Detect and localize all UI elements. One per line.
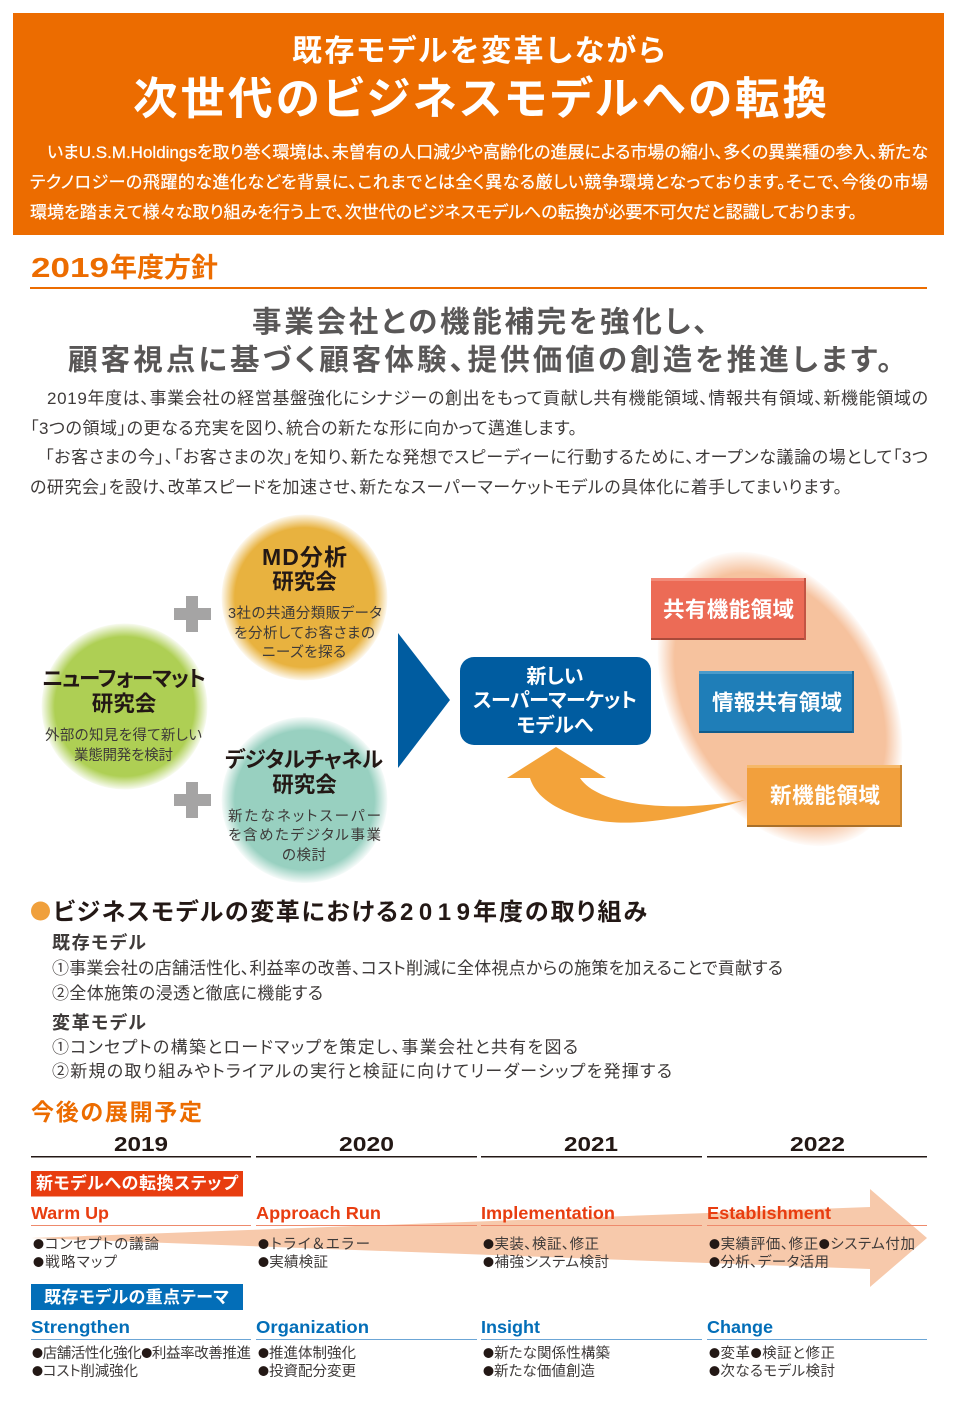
existing model theme names [31, 1317, 927, 1340]
circle: digital channel study group: を含めたデジタル事業 [228, 824, 381, 845]
year headers: 2019 [114, 1134, 168, 1156]
existing model theme names: Insight [481, 1317, 540, 1337]
heading: 2019 policy: 2019 [31, 252, 109, 283]
diagram: study groups and domains [42, 508, 953, 890]
policy body text: 「お客さまの今」、「お客さまの次」を知り、新たな発想でスピーディーに行動するために、オープンな議論の場として「3つ [45, 447, 928, 467]
circle: MD analysis study group: を分析してお客さまの [234, 622, 375, 643]
policy headline [68, 299, 892, 379]
new model step details: ●実績評価、修正●システム付加 [709, 1233, 915, 1254]
new model step names: Warm Up [31, 1203, 109, 1223]
circle: new format study group: ニューフォーマット [42, 662, 206, 693]
new model step details: ●戦略マップ [33, 1251, 118, 1272]
existing model theme details: ●投資配分変更 [258, 1360, 356, 1381]
arrow: blue chevron [398, 633, 450, 768]
existing model theme names: Organization [256, 1317, 369, 1337]
circle: new format study group: 外部の知見を得て新しい [45, 724, 202, 745]
panel: orange header banner [13, 13, 944, 235]
existing model theme details: ●コスト削減強化 [32, 1360, 138, 1381]
existing model text: 既存モデル [52, 929, 146, 955]
circle: digital channel study group [222, 717, 388, 883]
section heading: 2019 [400, 899, 470, 926]
reform model text: ①コンセプトの構築とロードマップを策定し、事業会社と共有を図る [52, 1033, 578, 1058]
circle: MD analysis study group: 3社の共通分類販データ [228, 604, 382, 622]
new model step names: Implementation [481, 1203, 615, 1223]
box: new supermarket model: スーパーマーケット [473, 684, 637, 713]
circle: MD analysis study group: MD分析 [262, 544, 347, 570]
existing model theme details: ●次なるモデル検討 [709, 1360, 835, 1381]
year headers: 2022 [790, 1134, 845, 1156]
arrow: large peach arrow [31, 1189, 927, 1287]
heading: 2019 policy [30, 246, 927, 289]
new model step names: Approach Run [256, 1203, 381, 1223]
reform model text: 変革モデル [52, 1009, 146, 1035]
policy body text: 「3つの領域」の更なる充実を図り、統合の新たな形に向かって邁進します。 [30, 419, 577, 438]
box: new supermarket model: 新しい [526, 660, 584, 689]
new model step details: ●コンセプトの議論 [33, 1233, 160, 1254]
circle: MD analysis study group: ニーズを探る [262, 641, 346, 662]
existing model theme details: ●店舗活性化強化●利益率改善推進 [32, 1342, 251, 1363]
box: shared function domain [651, 578, 806, 640]
new model step details: ●トライ＆エラー [258, 1233, 370, 1254]
banner title: 次世代のビジネスモデルへの転換 [133, 62, 827, 127]
existing model theme details: ●推進体制強化 [258, 1342, 356, 1363]
box: new supermarket model [460, 657, 651, 745]
circle: digital channel study group: デジタルチャネル [225, 743, 383, 774]
icon: orange bullet [31, 902, 50, 920]
policy headline: 事業会社との機能補完を強化し、 [252, 299, 708, 341]
existing model theme details: ●変革●検証と修正 [709, 1342, 835, 1363]
icon: plus lower [174, 782, 211, 818]
heading: future roadmap: 今後の展開予定 [31, 1093, 202, 1127]
year headers: 2020 [339, 1134, 394, 1156]
box: new function domain [747, 765, 902, 827]
year headers: 2021 [564, 1134, 618, 1156]
section heading: ビジネスモデルの変革における [53, 892, 398, 927]
new model step details [33, 1233, 915, 1272]
existing model text [52, 929, 783, 1004]
arrow: curved orange arrow [507, 747, 745, 823]
existing model theme names: Change [707, 1317, 773, 1337]
reform model text: ②新規の取り組みやトライアルの実行と検証に向けてリーダーシップを発揮する [52, 1057, 672, 1082]
heading: 2019 policy: 年度方針 [110, 246, 218, 285]
box: information sharing domain: 情報共有領域 [712, 686, 842, 717]
box: information sharing domain [699, 671, 854, 733]
section heading [53, 892, 647, 927]
label: existing model themes: 既存モデルの重点テーマ [44, 1283, 229, 1308]
circle: MD analysis study group: 研究会 [272, 565, 337, 596]
box: new function domain: 新機能領域 [770, 779, 880, 810]
circle: digital channel study group: の検討 [282, 844, 326, 865]
timeline roadmap [31, 1134, 927, 1381]
new model step details: ●実績検証 [258, 1251, 328, 1272]
circle: new format study group: 業態開発を検討 [74, 744, 173, 765]
circle: new format study group [42, 624, 208, 790]
box: shared function domain: 共有機能領域 [663, 593, 794, 624]
existing model theme details: ●新たな関係性構築 [483, 1342, 610, 1363]
circle: MD analysis study group [222, 514, 388, 680]
circle: digital channel study group: 新たなネットスーパー [228, 805, 381, 826]
icon: plus upper [174, 596, 211, 632]
section: business model reform initiatives [31, 892, 783, 1082]
existing model text: ①事業会社の店舗活性化、利益率の改善、コスト削減に全体視点からの施策を加えることで貢献する [52, 954, 783, 979]
new model step details: ●実装、検証、修正 [483, 1233, 599, 1254]
new model step details: ●分析、データ活用 [709, 1251, 829, 1272]
existing model theme details: ●新たな価値創造 [483, 1360, 595, 1381]
policy body text: 2019年度は、事業会社の経営基盤強化にシナジーの創出をもって貢献し共有機能領域、情報共有領域、新機能領域の [47, 389, 928, 408]
policy body text: の研究会」を設け、改革スピードを加速させ、新たなスーパーマーケットモデルの具体化に着手してまいります。 [30, 473, 842, 498]
reform model text [52, 1009, 672, 1082]
year headers [31, 1134, 927, 1158]
decorative ellipse behind domains [607, 508, 953, 890]
banner body text: テクノロジーの飛躍的な進化などを背景に、これまでとは全く異なる厳しい競争環境となっております。そこで、今後の市場 [30, 168, 928, 193]
circle: new format study group: 研究会 [92, 687, 157, 718]
section heading: 年度の取り組み [473, 892, 647, 927]
banner body text [30, 143, 928, 223]
new model step names [31, 1203, 927, 1226]
existing model text: ②全体施策の浸透と徹底に機能する [52, 979, 323, 1004]
policy body text [30, 389, 928, 498]
label: new model steps: 新モデルへの転換ステップ [36, 1169, 239, 1194]
new model step names: Establishment [707, 1203, 831, 1223]
policy headline: 顧客視点に基づく顧客体験、提供価値の創造を推進します。 [68, 337, 892, 379]
box: new supermarket model: モデルへ [517, 709, 594, 738]
banner body text: いまU.S.M.Holdingsを取り巻く環境は、未曽有の人口減少や高齢化の進展による市場の縮小、多くの異業種の参入、新たな [47, 143, 928, 162]
circle: digital channel study group: 研究会 [272, 768, 337, 799]
banner subtitle: 既存モデルを変革しながら [292, 26, 665, 70]
banner body text: 環境を踏まえて様々な取り組みを行う上で、次世代のビジネスモデルへの転換が必要不可欠だと認識しております。 [30, 198, 857, 223]
new model step details: ●補強システム検討 [483, 1251, 609, 1272]
existing model theme details [32, 1342, 835, 1381]
existing model theme names: Strengthen [31, 1317, 130, 1337]
